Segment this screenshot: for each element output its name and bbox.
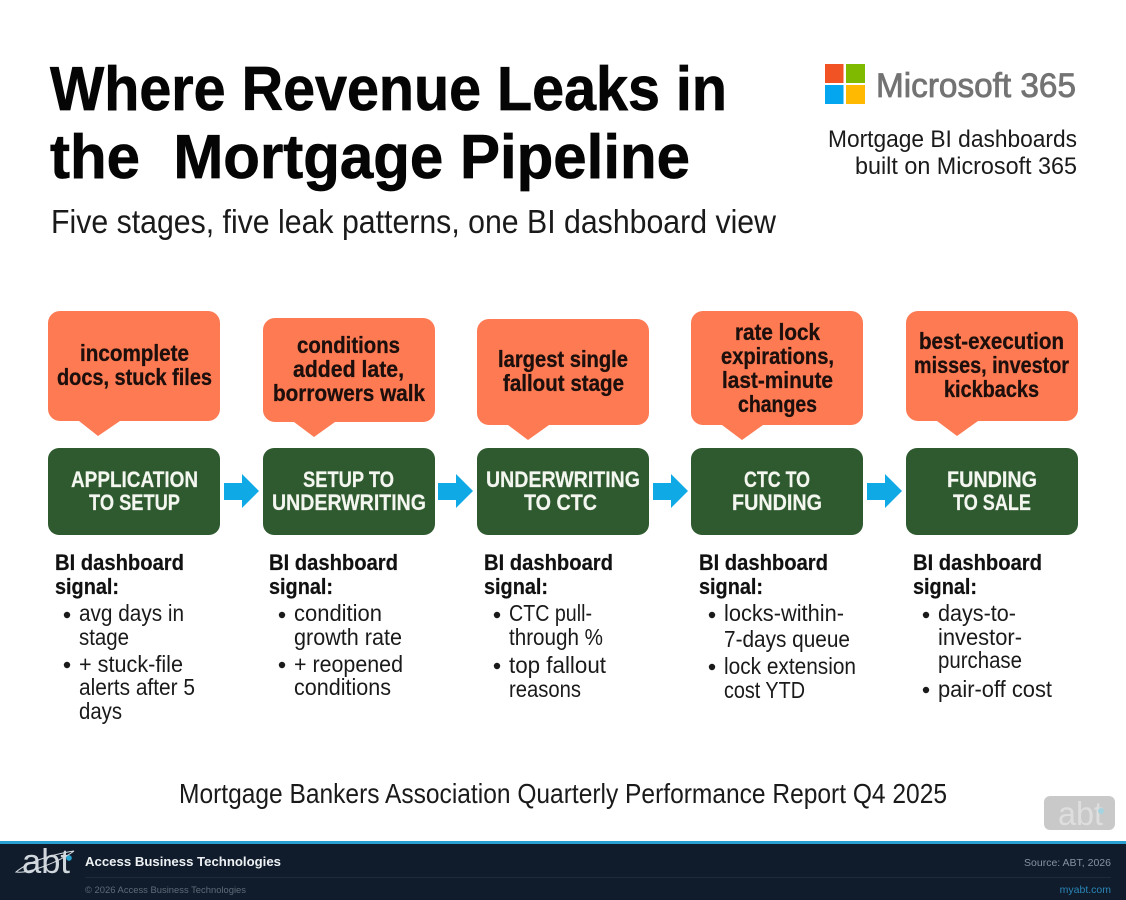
callout: stage 3 leak: largest single (498, 346, 628, 372)
BI signal list: stage 5 (913, 550, 1053, 702)
BI signal list: stage 4: locks-within- (724, 600, 844, 626)
stage box: setup to underwriting: SETUP TO (303, 467, 394, 492)
stage box: setup to underwriting: UNDERWRITING (272, 490, 426, 515)
arrow: stage 3 to 4 (653, 474, 688, 508)
footer source: Source: ABT, 2026 (1024, 857, 1111, 869)
callout: stage 2 leak (263, 318, 435, 437)
callout: stage 5 leak: kickbacks (944, 376, 1039, 402)
callout: stage 1 leak: incomplete (80, 340, 189, 366)
BI signal list: stage 1: stage (79, 624, 129, 650)
stage box: setup to underwriting (263, 448, 435, 535)
callout: stage 4 leak: expirations, (721, 343, 834, 369)
BI signal list: stage 1: days (79, 698, 122, 724)
watermark: abt logo: abt (1058, 795, 1103, 832)
callout: stage 5 leak: best-execution (919, 328, 1064, 354)
stage box: CTC to funding: CTC TO (744, 467, 810, 492)
callout: stage 2 leak: added late, (293, 356, 404, 382)
BI signal list: stage 1 (55, 550, 195, 724)
callout: stage 5 leak: misses, investor (914, 352, 1069, 378)
stage box: application to setup (48, 448, 220, 535)
BI signal list: stage 3 (484, 550, 613, 702)
panel: stage 1 (48, 311, 220, 724)
stage box: funding to sale: FUNDING (947, 467, 1037, 492)
callout: stage 1 leak: docs, stuck files (57, 364, 212, 390)
BI signal list: stage 2: condition (294, 600, 382, 626)
callout: stage 1 leak (48, 311, 220, 436)
watermark: abt logo (1044, 795, 1115, 832)
stage box: application to setup: APPLICATION (71, 467, 198, 492)
BI signal list: stage 1: avg days in (79, 600, 184, 626)
stage box: underwriting to CTC: TO CTC (524, 490, 597, 515)
callout: stage 4 leak: last-minute (722, 367, 833, 393)
BI signal list: stage 4: cost YTD (724, 677, 805, 703)
Microsoft 365 wordmark: Microsoft 365 (876, 67, 1076, 105)
BI signal list: stage 2: growth rate (294, 624, 402, 650)
BI signal list: stage 4: lock extension (724, 653, 856, 679)
BI signal list: stage 1: + stuck-file (79, 651, 183, 677)
BI signal list: stage 4: BI dashboard (699, 550, 828, 575)
BI signal list: stage 3: reasons (509, 676, 581, 702)
stage box: CTC to funding (691, 448, 863, 535)
BI signal list: stage 3: BI dashboard (484, 550, 613, 575)
BI signal list: stage 2 (269, 550, 403, 700)
stage box: funding to sale: TO SALE (953, 490, 1031, 515)
BI signal list: stage 4: signal: (699, 574, 763, 599)
panel: stage 4 (691, 311, 863, 703)
BI signal list: stage 5: purchase (938, 647, 1022, 673)
footer logo: abt: abt (22, 843, 71, 881)
BI signal list: stage 5: BI dashboard (913, 550, 1042, 575)
BI signal list: stage 2: BI dashboard (269, 550, 398, 575)
footer copyright: © 2026 Access Business Technologies (85, 885, 246, 896)
panel: stage 5 (906, 311, 1078, 702)
icon: Microsoft logo (825, 64, 865, 104)
arrow: stage 1 to 2 (224, 474, 259, 508)
panel: stage 2 (263, 318, 435, 700)
BI signal list: stage 4: 7-days queue (724, 626, 850, 652)
stage box: underwriting to CTC: UNDERWRITING (486, 467, 640, 492)
title: Where Revenue Leaks in (50, 55, 727, 124)
BI signal list: stage 1: signal: (55, 574, 119, 599)
callout: stage 2 leak: conditions (297, 332, 400, 358)
title (50, 55, 727, 192)
platform note (828, 126, 1077, 180)
BI signal list: stage 3: CTC pull- (509, 600, 592, 626)
BI signal list: stage 5: investor- (938, 624, 1022, 650)
BI signal list: stage 5: pair-off cost (938, 676, 1053, 702)
arrow: stage 2 to 3 (438, 474, 473, 508)
BI signal list: stage 3: through % (509, 624, 603, 650)
platform note: built on Microsoft 365 (855, 153, 1077, 180)
BI signal list: stage 1: alerts after 5 (79, 674, 195, 700)
BI signal list: stage 2: conditions (294, 674, 391, 700)
callout: stage 2 leak: borrowers walk (273, 380, 425, 406)
panel: stage 3 (477, 319, 649, 702)
BI signal list: stage 4 (699, 550, 856, 703)
stage box: funding to sale (906, 448, 1078, 535)
BI signal list: stage 5: days-to- (938, 600, 1016, 626)
arrow: stage 4 to 5 (867, 474, 902, 508)
BI signal list: stage 3: top fallout (509, 652, 607, 678)
footer company name: Access Business Technologies (85, 854, 281, 869)
title: the Mortgage Pipeline (50, 123, 690, 192)
stage box: underwriting to CTC (477, 448, 649, 535)
callout: stage 3 leak (477, 319, 649, 440)
callout: stage 4 leak: changes (738, 391, 817, 417)
stage box: CTC to funding: FUNDING (732, 490, 822, 515)
source line: Mortgage Bankers Association Quarterly Performance Report Q4 2025 (179, 778, 947, 809)
callout: stage 3 leak: fallout stage (503, 370, 624, 396)
BI signal list: stage 5: signal: (913, 574, 977, 599)
BI signal list: stage 2: + reopened (294, 651, 403, 677)
callout: stage 4 leak: rate lock (735, 319, 820, 345)
callout: stage 5 leak (906, 311, 1078, 436)
footer bar (0, 841, 1126, 900)
platform note: Mortgage BI dashboards (828, 126, 1077, 153)
callout: stage 4 leak (691, 311, 863, 440)
footer link: myabt.com (1060, 884, 1111, 896)
stage box: application to setup: TO SETUP (89, 490, 180, 515)
BI signal list: stage 1: BI dashboard (55, 550, 184, 575)
subtitle: Five stages, five leak patterns, one BI dashboard view (51, 203, 776, 240)
BI signal list: stage 2: signal: (269, 574, 333, 599)
BI signal list: stage 3: signal: (484, 574, 548, 599)
